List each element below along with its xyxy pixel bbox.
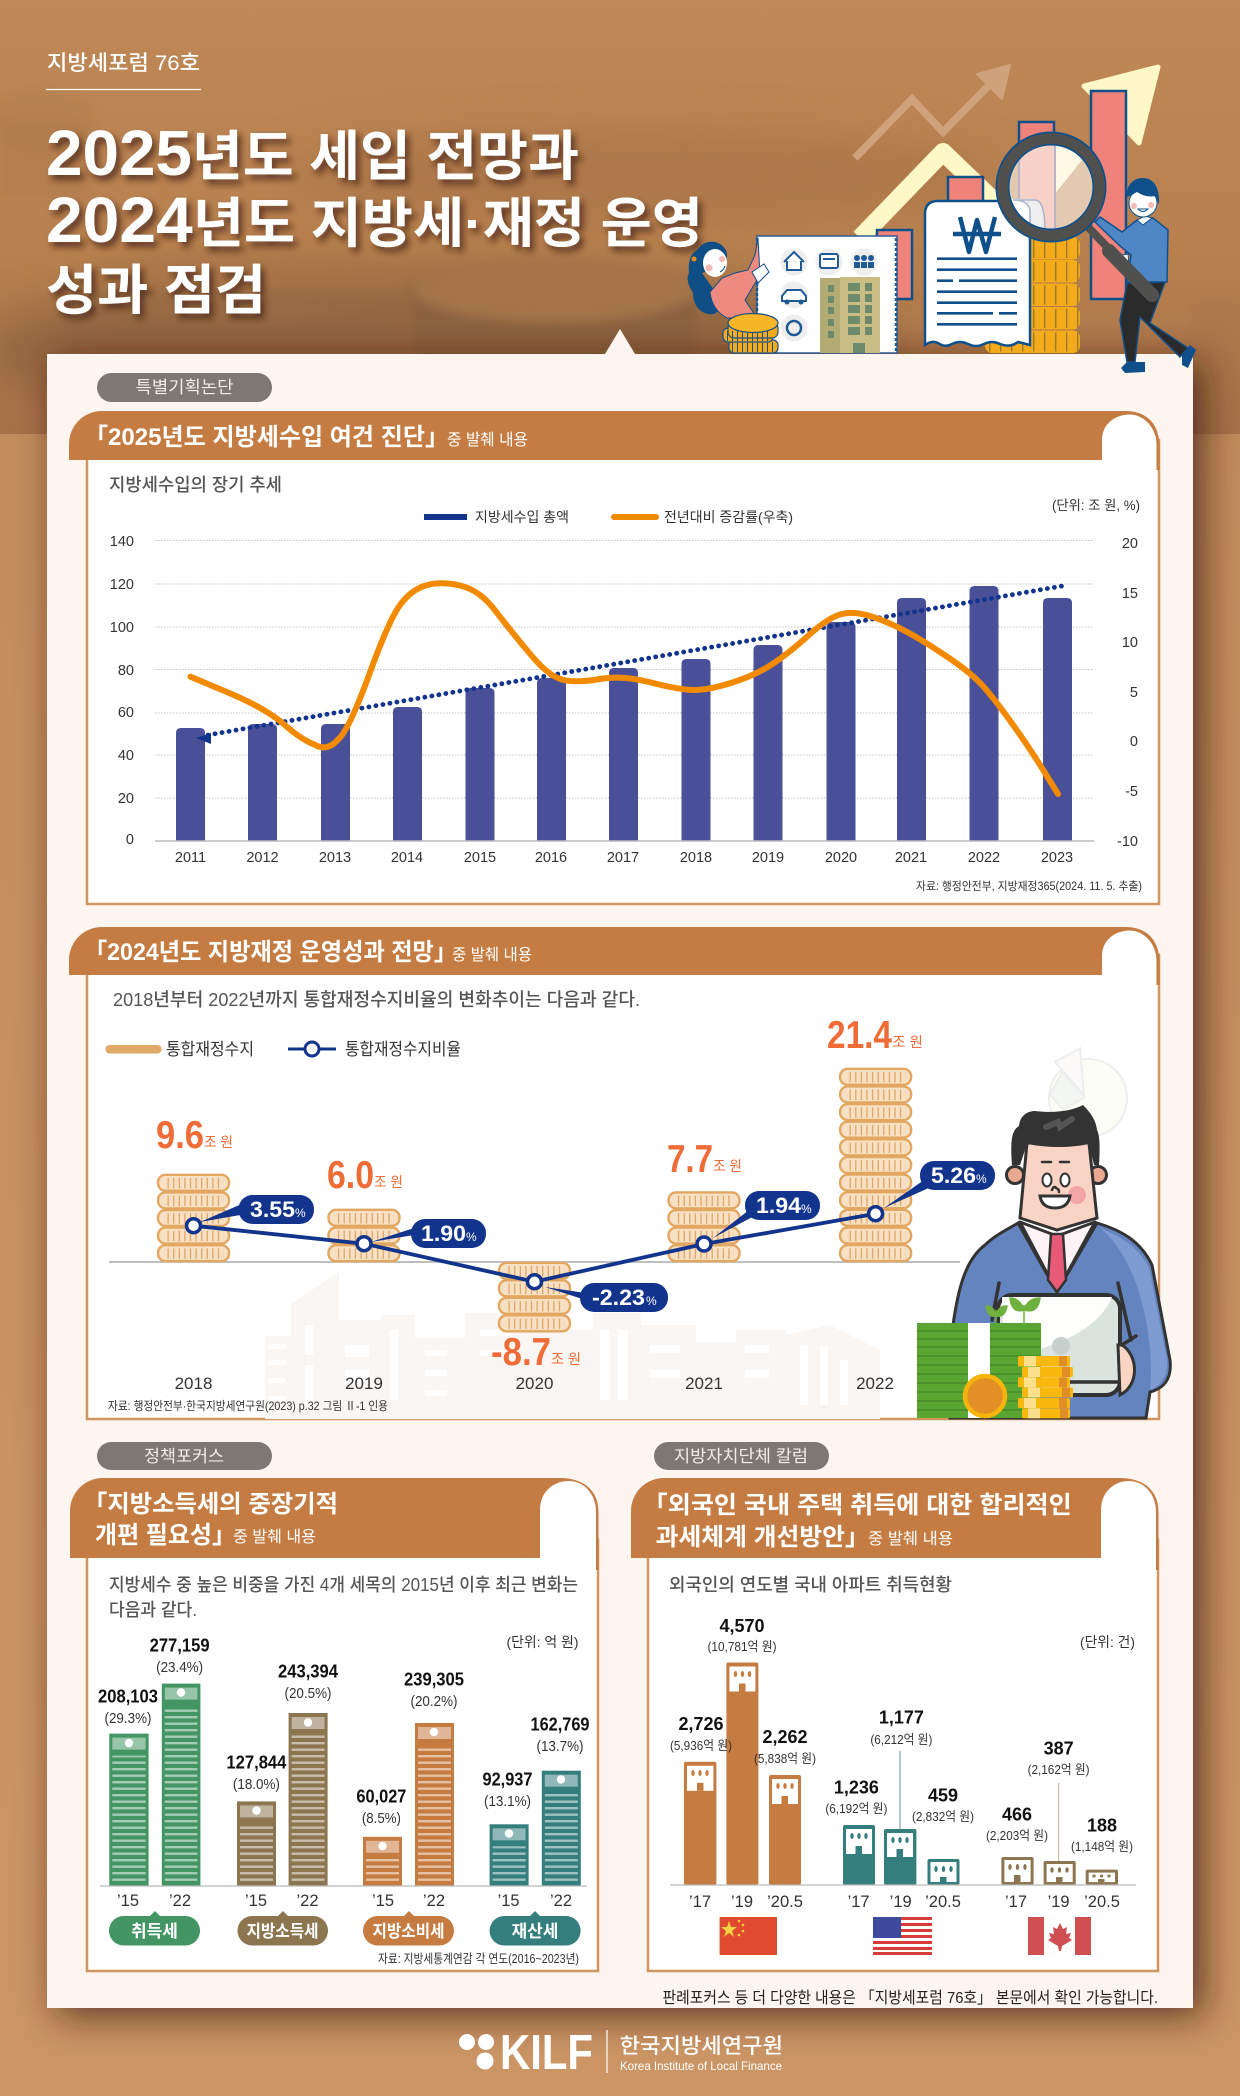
value labels: 1,177 (879, 1708, 924, 1728)
left axis: 120 (110, 577, 134, 593)
gold coins (1018, 1356, 1073, 1418)
right axis: 10 (1122, 635, 1138, 651)
years: 2017 (607, 850, 639, 866)
logo: KILF: KILF (500, 2026, 593, 2080)
category pills (109, 1911, 581, 1946)
panel header: 중 발췌 내용 (452, 946, 532, 964)
panel: 2025 local tax revenue (69, 411, 1160, 904)
baseline (109, 1261, 960, 1263)
year labels: ’22 (296, 1892, 319, 1910)
panel: local income tax (70, 1478, 598, 1971)
years: 2014 (391, 850, 423, 866)
years: 2020 (825, 850, 857, 866)
unit: (단위: 억 원) (506, 1634, 578, 1650)
callouts: ratio values: % (466, 1230, 477, 1244)
amount labels: 7.7 (667, 1138, 713, 1181)
years: 2021 (895, 850, 927, 866)
value labels (670, 1616, 1133, 1854)
source: 자료: 행정안전부, 지방재정365(2024. 11. 5. 추출) (916, 880, 1142, 893)
legend: 통합재정수지비율 (345, 1040, 461, 1059)
tag: special feature (97, 373, 272, 402)
value labels: (13.1%) (484, 1793, 531, 1810)
value labels: 2,726 (678, 1714, 724, 1734)
years: 2022 (968, 850, 1000, 866)
callouts: ratio values: 5.26 (931, 1163, 976, 1188)
bars (176, 586, 1072, 841)
right axis: 0 (1130, 734, 1138, 750)
bars (877, 91, 1126, 299)
panel header: 중 발췌 내용 (868, 1530, 953, 1548)
bar chart: USA (843, 1825, 960, 1885)
legend: 통합재정수지 (166, 1040, 254, 1059)
value labels: (2,203억 원) (986, 1828, 1048, 1843)
icon: businessman with laptop and money (917, 1105, 1170, 1418)
year labels: ’22 (169, 1892, 191, 1910)
panel header: 「2025년도 지방세수입 여건 진단」 (84, 424, 449, 451)
left axis: 40 (118, 748, 134, 764)
value labels: (29.3%) (104, 1710, 152, 1727)
year labels: ’22 (423, 1892, 445, 1910)
panel header: 「외국인 국내 주택 취득에 대한 합리적인 (643, 1492, 1072, 1519)
value labels: 277,159 (150, 1636, 210, 1656)
value labels: 239,305 (404, 1670, 464, 1690)
amount labels: 조 원 (374, 1174, 403, 1190)
panel: foreign housing purchases (631, 1478, 1158, 1971)
decorative pie chart (1049, 1048, 1127, 1137)
tag: policy focus: 정책포커스 (144, 1447, 224, 1466)
panel header: 개편 필요성」 (95, 1522, 236, 1549)
logo: KILF (459, 2026, 783, 2080)
right axis: -10 (1117, 834, 1138, 850)
years: 2016 (535, 850, 567, 866)
value labels: 243,394 (278, 1662, 338, 1682)
issue label: 지방세포럼 76호 (47, 52, 200, 75)
years: 2023 (1041, 850, 1073, 866)
panel header: 「2024년도 지방재정 운영성과 전망」 (84, 939, 457, 966)
tag: policy focus (97, 1442, 272, 1470)
value labels: 387 (1044, 1738, 1074, 1758)
year labels: ’20.5 (767, 1893, 803, 1911)
year labels (689, 1893, 1120, 1911)
panel: 2024 local finance (69, 927, 1170, 1419)
legend (106, 1040, 461, 1059)
legend (424, 509, 793, 525)
amount labels: 6.0 (327, 1154, 374, 1197)
amount labels: 조 원 (713, 1158, 742, 1174)
years: 2018 (175, 1374, 212, 1393)
title (46, 117, 703, 321)
icon: Canada flag (1028, 1917, 1091, 1955)
growth rate line (190, 583, 1058, 794)
amount labels: 조 원 (204, 1134, 233, 1150)
money (917, 1298, 1041, 1418)
amount labels: 조 원 (892, 1034, 923, 1050)
value labels: 60,027 (356, 1786, 406, 1806)
title: 2025년도 세입 전망과 (46, 117, 579, 189)
legend: 지방세수입 총액 (475, 509, 569, 525)
right axis: 20 (1122, 536, 1138, 552)
title: 2024년도 지방세·재정 운영 (46, 184, 703, 256)
callouts: ratio values: -2.23 (592, 1285, 645, 1310)
year labels: ’15 (245, 1892, 267, 1910)
value labels: (10,781억 원) (708, 1639, 776, 1654)
left axis: 140 (110, 534, 134, 550)
year labels: ’17 (689, 1893, 711, 1911)
tag: local government column (654, 1442, 829, 1470)
panel header (70, 1478, 598, 1572)
callouts: ratio values: % (976, 1172, 987, 1186)
unit: (단위: 건) (1080, 1634, 1135, 1650)
icon: small coins (723, 314, 778, 353)
chart subtitle: 지방세수입의 장기 추세 (109, 475, 282, 495)
category pills: 지방소비세 (372, 1922, 444, 1941)
value labels: (5,936억 원) (670, 1738, 732, 1753)
icon: tax document with building (757, 236, 897, 353)
year labels: ’20.5 (925, 1893, 961, 1911)
right axis: 5 (1130, 685, 1138, 701)
background city (265, 1272, 880, 1419)
chart: revenue bars with growth line (110, 534, 1138, 866)
value labels: 459 (928, 1786, 958, 1806)
source: 자료: 지방세통계연감 각 연도(2016~2023년) (378, 1952, 579, 1966)
value labels: 208,103 (98, 1686, 158, 1706)
years: 2012 (246, 850, 279, 866)
bar chart: Canada (1001, 1857, 1118, 1885)
intro text: 지방세수 중 높은 비중을 가진 4개 세목의 2015년 이후 최근 변화는 (109, 1575, 578, 1595)
icon: pale arrow (855, 65, 1010, 158)
value labels: 188 (1087, 1816, 1117, 1836)
years: 2019 (752, 850, 784, 866)
intro text: 다음과 같다. (109, 1600, 197, 1620)
value labels: 1,236 (834, 1778, 879, 1798)
years: 2015 (464, 850, 496, 866)
ratio line (186, 1180, 931, 1300)
category pills: 재산세 (512, 1922, 558, 1941)
chart subtitle: 외국인의 연도별 국내 아파트 취득현황 (669, 1575, 952, 1595)
year labels: ’20.5 (1084, 1893, 1120, 1911)
years: 2019 (345, 1374, 383, 1393)
years (175, 1374, 894, 1393)
icon: coin stack (985, 237, 1080, 353)
year labels: ’15 (372, 1892, 394, 1910)
left axis: 0 (126, 832, 134, 848)
year labels: ’15 (117, 1892, 139, 1910)
value labels: (13.7%) (536, 1738, 584, 1755)
callouts: ratio values: % (646, 1294, 657, 1308)
callouts: ratio values: 1.94 (756, 1193, 802, 1218)
value labels: 2,262 (762, 1727, 808, 1747)
value labels: (20.5%) (284, 1685, 332, 1702)
years: 2018 (680, 850, 712, 866)
logo: KILF: 한국지방세연구원 (620, 2035, 783, 2058)
leader lines (900, 1751, 1059, 1861)
source: 자료: 행정안전부·한국지방세연구원(2023) p.32 그림 Ⅱ-1 인용 (108, 1398, 388, 1413)
year labels: ’17 (1005, 1893, 1027, 1911)
value labels: (1,148억 원) (1071, 1839, 1133, 1854)
year labels: ’19 (731, 1893, 753, 1911)
value labels: (18.0%) (233, 1776, 280, 1793)
year labels: ’19 (890, 1893, 912, 1911)
left axis: 80 (118, 663, 134, 679)
icon: receipt (925, 201, 1030, 346)
value labels: (6,192억 원) (825, 1801, 887, 1816)
category pills: 지방소득세 (246, 1922, 318, 1941)
value labels: (8.5%) (362, 1810, 401, 1827)
amount labels: 9.6 (156, 1114, 204, 1157)
amount labels (156, 1014, 923, 1374)
bar chart: tax categories (100, 1684, 587, 1886)
panel header (631, 1478, 1158, 1572)
right axis: -5 (1125, 784, 1138, 800)
white content panel (47, 329, 1193, 2008)
tag: local government column: 지방자치단체 칼럼 (674, 1447, 808, 1466)
right axis (1117, 536, 1138, 850)
value labels: 162,769 (530, 1714, 590, 1734)
value labels: 4,570 (719, 1616, 765, 1636)
amount labels: 21.4 (827, 1014, 892, 1057)
value labels: (6,212억 원) (870, 1732, 932, 1747)
value labels: (20.2%) (410, 1693, 458, 1710)
left axis: 20 (118, 791, 134, 807)
tag: special feature: 특별기획논단 (136, 378, 234, 397)
illustration: rising arrows and bars with receipt, woman and man with magnifier (688, 65, 1196, 373)
panel header: 「지방소득세의 중장기적 (83, 1491, 338, 1518)
panel header: 과세체계 개선방안」 (656, 1524, 870, 1551)
bar chart: China (684, 1662, 801, 1885)
icon: magnifier (1000, 138, 1152, 295)
value labels: 466 (1002, 1804, 1032, 1824)
value labels (98, 1636, 590, 1827)
callouts: ratio values: 1.90 (421, 1221, 466, 1246)
icon: man (1095, 178, 1196, 373)
year labels: ’15 (498, 1892, 520, 1910)
value labels: 127,844 (226, 1752, 286, 1772)
icon: USA flag (873, 1917, 932, 1955)
icon: yellow arrow (860, 67, 1158, 245)
callouts: ratio values: % (801, 1202, 812, 1216)
intro text (109, 1575, 578, 1620)
years: 2011 (175, 850, 206, 866)
intro text: 2018년부터 2022년까지 통합재정수지비율의 변화추이는 다음과 같다. (113, 989, 640, 1010)
years: 2022 (856, 1374, 894, 1393)
value labels: (5,838억 원) (754, 1751, 816, 1766)
title: 성과 점검 (46, 261, 266, 321)
value labels: (2,162억 원) (1028, 1762, 1090, 1777)
logo: KILF: Korea Institute of Local Finance (620, 2059, 782, 2073)
year labels: ’17 (848, 1893, 870, 1911)
year labels: ’19 (1048, 1893, 1070, 1911)
left axis (110, 534, 134, 848)
left axis: 60 (118, 705, 134, 721)
chart: coin stacks (158, 1069, 911, 1331)
trend line (196, 586, 1062, 744)
unit: (단위: 조 원, %) (1052, 498, 1140, 513)
legend: 전년대비 증감률(우축) (664, 509, 793, 525)
value labels: (2,832억 원) (912, 1809, 974, 1824)
amount labels: 조 원 (551, 1351, 581, 1367)
icon: China flag (720, 1917, 777, 1955)
panel header: 중 발췌 내용 (233, 1528, 316, 1546)
callouts: ratio values: 3.55 (250, 1197, 295, 1222)
year labels (117, 1892, 572, 1910)
panel header (69, 411, 1160, 472)
callouts: ratio values: % (295, 1206, 306, 1220)
left axis: 100 (110, 620, 134, 636)
value labels: 92,937 (482, 1770, 532, 1790)
right axis: 15 (1122, 586, 1138, 602)
callouts: ratio values (238, 1161, 995, 1312)
years (175, 850, 1073, 866)
category pills: 취득세 (131, 1922, 178, 1941)
years: 2021 (685, 1374, 723, 1393)
value labels: (23.4%) (156, 1659, 203, 1676)
footer note: 판례포커스 등 더 다양한 내용은 「지방세포럼 76호」 본문에서 확인 가능합니다. (662, 1989, 1158, 2007)
panel header (69, 927, 1160, 987)
years: 2013 (319, 850, 351, 866)
years: 2020 (516, 1374, 553, 1393)
amount labels: -8.7 (491, 1331, 551, 1374)
panel header: 중 발췌 내용 (447, 431, 528, 449)
icon: woman (688, 238, 769, 318)
year labels: ’22 (550, 1892, 572, 1910)
